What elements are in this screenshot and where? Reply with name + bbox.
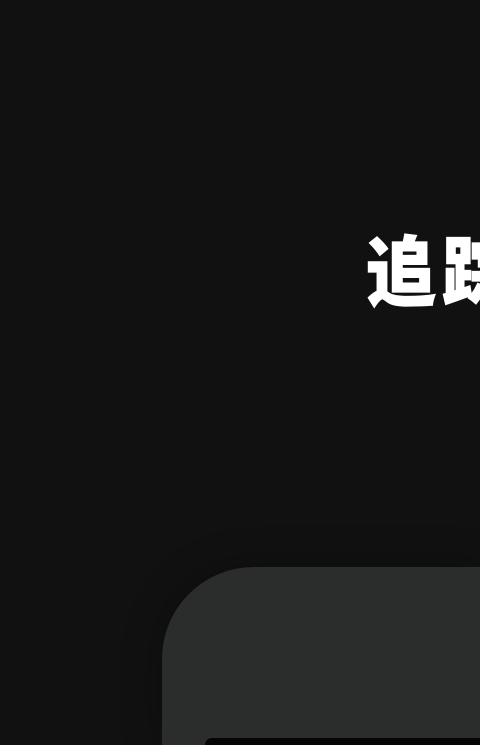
device screen (205, 738, 480, 745)
panel: device frame (162, 567, 480, 745)
